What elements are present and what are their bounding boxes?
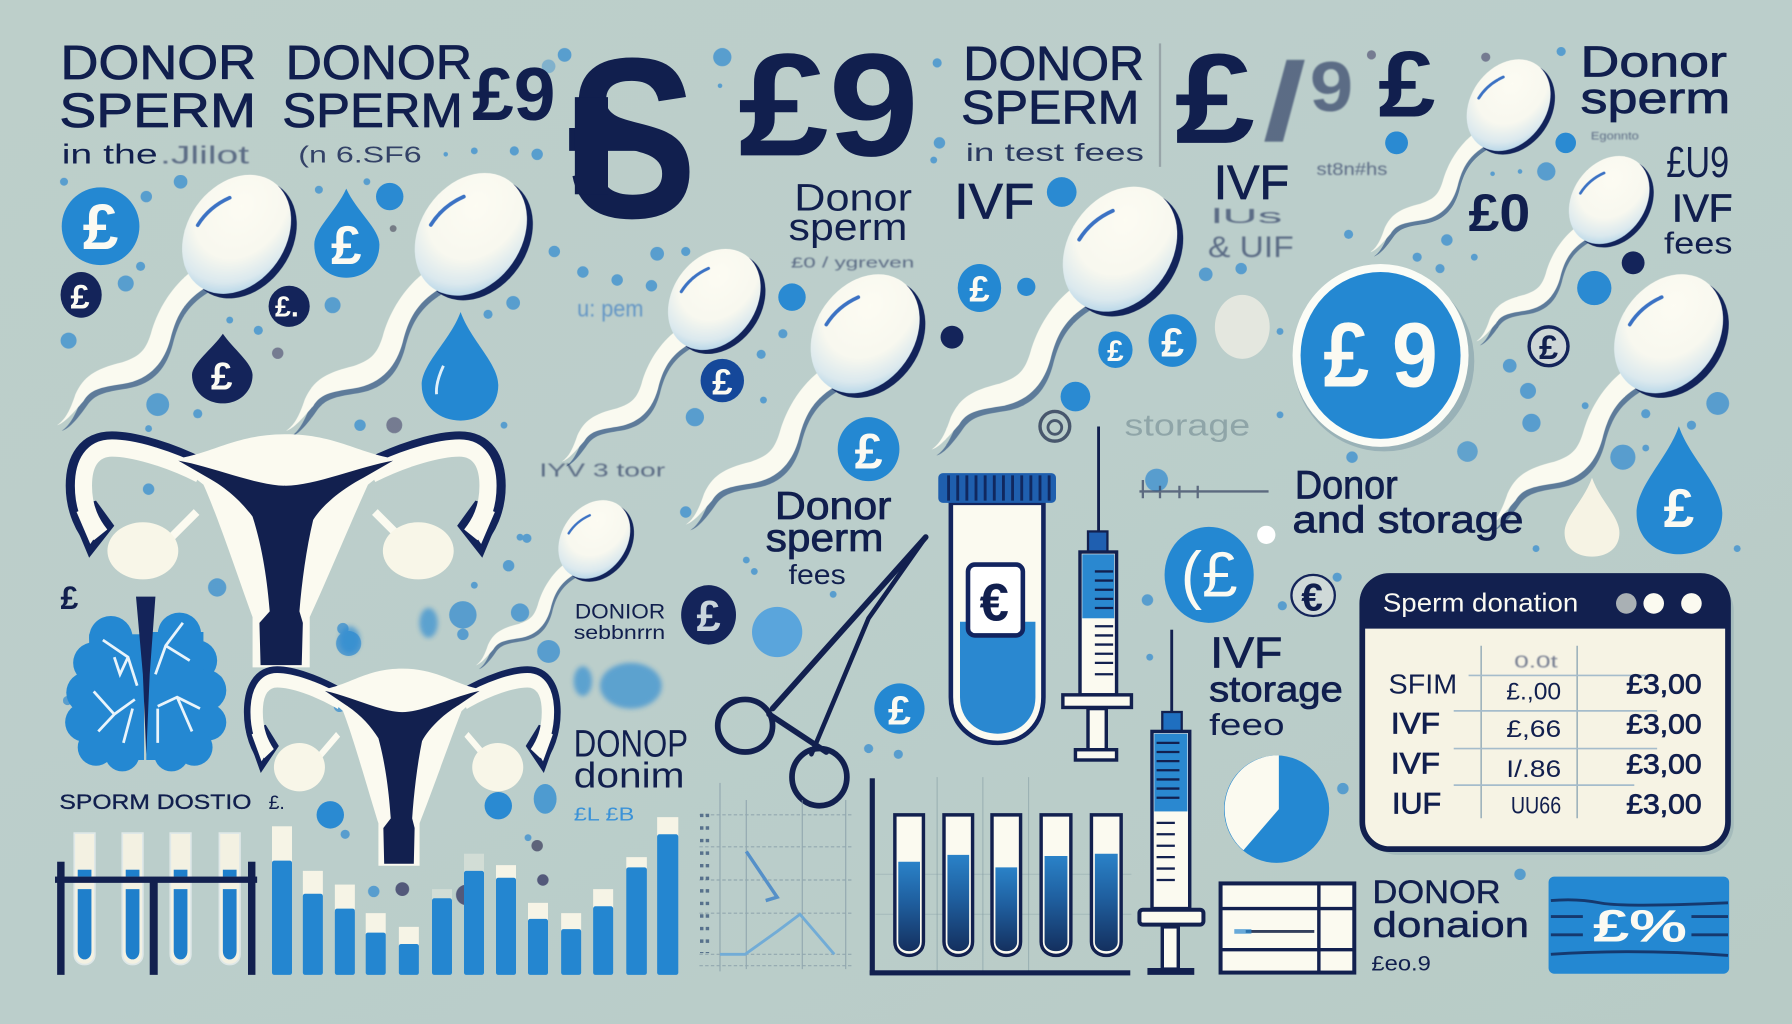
text: Donor donim: £L £B <box>574 804 634 825</box>
title: Donor Sperm in the UK: SPERM <box>59 85 256 138</box>
coin: navy pound left <box>61 272 102 318</box>
coin: dark blue pound <box>701 359 744 402</box>
bar chart <box>272 817 678 975</box>
blue dots <box>376 131 1611 411</box>
coin: navy pound: £. <box>275 292 299 324</box>
text: IVF second: IVF <box>1214 157 1289 210</box>
navy dot <box>941 326 963 349</box>
text: price and IVF fees right: IVF <box>1672 188 1733 231</box>
price: £9 small: £9 <box>472 52 555 136</box>
title: Donor Sperm test fees <box>961 38 1144 167</box>
text: IVF second: & UIF <box>1208 231 1294 264</box>
text: Donor sperm centre: sperm <box>789 206 907 248</box>
test tube with pound label <box>938 473 1056 743</box>
table rows <box>1389 646 1702 821</box>
drop: large blue <box>422 312 498 421</box>
blue price box <box>1549 877 1729 974</box>
table rows: 0.0t <box>1514 651 1558 671</box>
drop: blue pound small <box>1149 314 1197 367</box>
egg <box>1215 295 1270 359</box>
table panel: sperm donation <box>1360 574 1734 855</box>
title: Donor Sperm in the UK: .Jlilot <box>160 141 249 169</box>
text: Donor sebbnrrn: DONIOR <box>575 598 665 623</box>
table rows: £3,00 <box>1626 749 1702 780</box>
faded text: in small garbled: IYV 3 toor <box>539 460 665 481</box>
text: Donor sperm fees: sperm <box>766 517 883 560</box>
text: Donor sebbnrrn: sebbnrrn <box>574 622 665 644</box>
drop: blue pound right: £ <box>1664 477 1694 539</box>
text: IVF storage fees <box>1209 629 1343 742</box>
coin: navy drop pound <box>681 585 736 645</box>
line chart faded <box>699 783 851 971</box>
text: faded label: SPORM DOSTIO <box>59 789 251 814</box>
text: Donor donim <box>574 723 688 825</box>
title: Donor Sperm repeated: SPERM <box>282 85 463 138</box>
table rows: £3,00 <box>1626 789 1702 820</box>
table rows: SFIM <box>1389 669 1457 700</box>
coin: blue pound near IVF <box>958 264 1001 312</box>
text: Donor sperm centre <box>789 176 914 271</box>
tube chart <box>870 777 1131 975</box>
faded price £/9: / <box>1263 41 1306 163</box>
title: Donor Sperm in the UK: in the <box>62 138 158 169</box>
text: Donor sperm top right: Egonnto <box>1591 130 1639 142</box>
coin: blue pound by forceps <box>874 683 925 734</box>
coin: small blue pound <box>1098 331 1133 368</box>
coin: dark blue pound: £ <box>712 361 732 402</box>
table rows: IVF <box>1391 708 1440 741</box>
faded text: in small garbled <box>539 296 665 481</box>
text: IVF storage fees: IVF <box>1210 629 1282 677</box>
text: Donor and storage: and storage <box>1293 499 1523 541</box>
pound symbol: £ <box>1378 32 1435 137</box>
faded price £/9 <box>1159 28 1353 171</box>
sperm cells <box>57 43 1751 669</box>
table rows: £,66 <box>1506 716 1561 743</box>
text: IVF: IVF <box>954 172 1034 229</box>
window dots <box>1616 593 1702 614</box>
test tube with pound label: € <box>980 574 1009 633</box>
table rows: IUF <box>1392 788 1441 821</box>
text: Donor sperm fees: fees <box>789 559 846 590</box>
text: Donor sperm centre: Donor <box>794 176 912 218</box>
title: Donor Sperm test fees: DONOR <box>963 38 1144 91</box>
tube rack <box>55 833 257 975</box>
text: faded label: £. <box>269 792 285 814</box>
table rows: £3,00 <box>1626 709 1702 740</box>
coin: navy pound left: £ <box>70 279 90 317</box>
small document icon <box>1221 883 1354 973</box>
table title: Sperm donation <box>1383 587 1578 617</box>
blue coin with pound: (£ <box>1181 539 1238 611</box>
coin: blue pound by forceps: £ <box>888 688 911 734</box>
drop: navy pound <box>192 334 253 403</box>
title: Donor Sperm in the UK <box>59 37 256 169</box>
drop: blue pound: £ <box>331 214 362 276</box>
text: Donor sperm top right <box>1581 39 1730 142</box>
coin: blue pound centre: £ <box>855 423 883 480</box>
coin: navy drop pound: £ <box>697 593 721 641</box>
coin: blue pound near IVF: £ <box>969 269 990 310</box>
drop: blue pound <box>314 189 379 278</box>
coin: navy pound outline <box>1291 575 1335 619</box>
text: Donor sebbnrrn <box>574 598 665 644</box>
text: Donor donim: donim <box>574 754 685 795</box>
pie chart <box>1224 755 1329 863</box>
syringe lower <box>1139 630 1203 975</box>
title: Donor Sperm in the UK: DONOR <box>61 37 256 90</box>
uterus large <box>69 434 503 667</box>
ring icon <box>1040 411 1070 441</box>
syringe upper <box>1063 426 1131 760</box>
text: Donor donation fees: DONOR <box>1373 874 1501 910</box>
pound symbol left: £ <box>61 580 79 616</box>
drop: navy pound: £ <box>211 356 233 399</box>
table rows: £3,00 <box>1626 669 1702 700</box>
text: Donor sperm top right: Donor <box>1581 39 1727 87</box>
text: faded storage: storage <box>1125 407 1250 442</box>
text: IVF second <box>1208 157 1387 264</box>
text: price and IVF fees right: fees <box>1664 226 1733 261</box>
price £0: £0 <box>1469 184 1530 243</box>
navy dot right <box>1622 251 1645 274</box>
text: IVF storage fees: storage <box>1209 669 1343 710</box>
text: Donor sperm fees: Donor <box>775 485 891 528</box>
large coin: £9 <box>1293 264 1474 451</box>
text: Donor sperm centre: £0 / ygreven <box>791 255 914 271</box>
faded text: in small garbled: u: pem <box>577 296 643 322</box>
large coin: £9: £ 9 <box>1323 304 1438 406</box>
coin: navy pound <box>269 286 310 327</box>
text: Donor donation fees: £eo.9 <box>1371 950 1431 975</box>
title: Donor Sperm repeated: (n 6.SF6 <box>298 141 422 167</box>
table rows: UU66 <box>1511 793 1561 820</box>
text: price and IVF fees right: £U9 <box>1666 139 1729 187</box>
table rows: IVF <box>1391 748 1440 781</box>
drop: blue pound right <box>1637 426 1722 554</box>
coin: blue pound <box>62 187 139 265</box>
title: Donor Sperm test fees: SPERM <box>961 81 1139 133</box>
text: IVF second: st8n#hs <box>1317 159 1387 179</box>
coin: pale blue <box>752 607 802 657</box>
lungs <box>65 597 226 771</box>
blue price box: £% <box>1593 901 1687 952</box>
faded price £/9: 9 <box>1310 48 1353 127</box>
text: Donor donation fees <box>1371 874 1529 975</box>
forceps <box>718 537 926 806</box>
text: Donor sperm fees <box>766 485 891 590</box>
faded scale marks <box>1139 480 1269 498</box>
coin: blue pound centre <box>838 417 899 481</box>
uterus small <box>246 669 559 866</box>
title: Donor Sperm repeated <box>282 37 472 167</box>
coin: navy pound right <box>1529 327 1568 367</box>
title: Donor Sperm repeated: DONOR <box>286 37 472 90</box>
text: IVF storage fees: feeo <box>1209 707 1285 742</box>
white dot <box>1257 526 1275 544</box>
coin: navy pound outline: € <box>1301 576 1323 619</box>
faded blobs <box>339 608 662 709</box>
text: Donor donim: DONOP <box>574 723 688 765</box>
text: Donor donation fees: donaion <box>1373 904 1529 945</box>
drop: cream <box>1565 478 1619 557</box>
text: price and IVF fees right <box>1664 139 1733 261</box>
faded price £/9: £ <box>1175 28 1255 171</box>
table rows: £.,00 <box>1506 678 1561 705</box>
large price £9: £9 <box>738 23 919 186</box>
drop: blue pound small: £ <box>1161 320 1184 366</box>
text: Donor and storage <box>1293 463 1523 541</box>
text: IVF second: lUs <box>1211 205 1282 228</box>
coin: small blue pound: £ <box>1107 335 1124 368</box>
coin: blue pound: £ <box>83 191 118 263</box>
table rows: I/.86 <box>1506 756 1561 783</box>
blue coin with pound <box>1165 527 1254 623</box>
coins below uterus <box>317 784 557 829</box>
coin: navy pound right: £ <box>1539 329 1558 367</box>
large currency symbol: S <box>567 11 697 266</box>
text: Donor and storage: Donor <box>1295 463 1398 507</box>
title: Donor Sperm test fees: in test fees <box>966 139 1144 167</box>
text: Donor sperm top right: sperm <box>1581 75 1730 123</box>
